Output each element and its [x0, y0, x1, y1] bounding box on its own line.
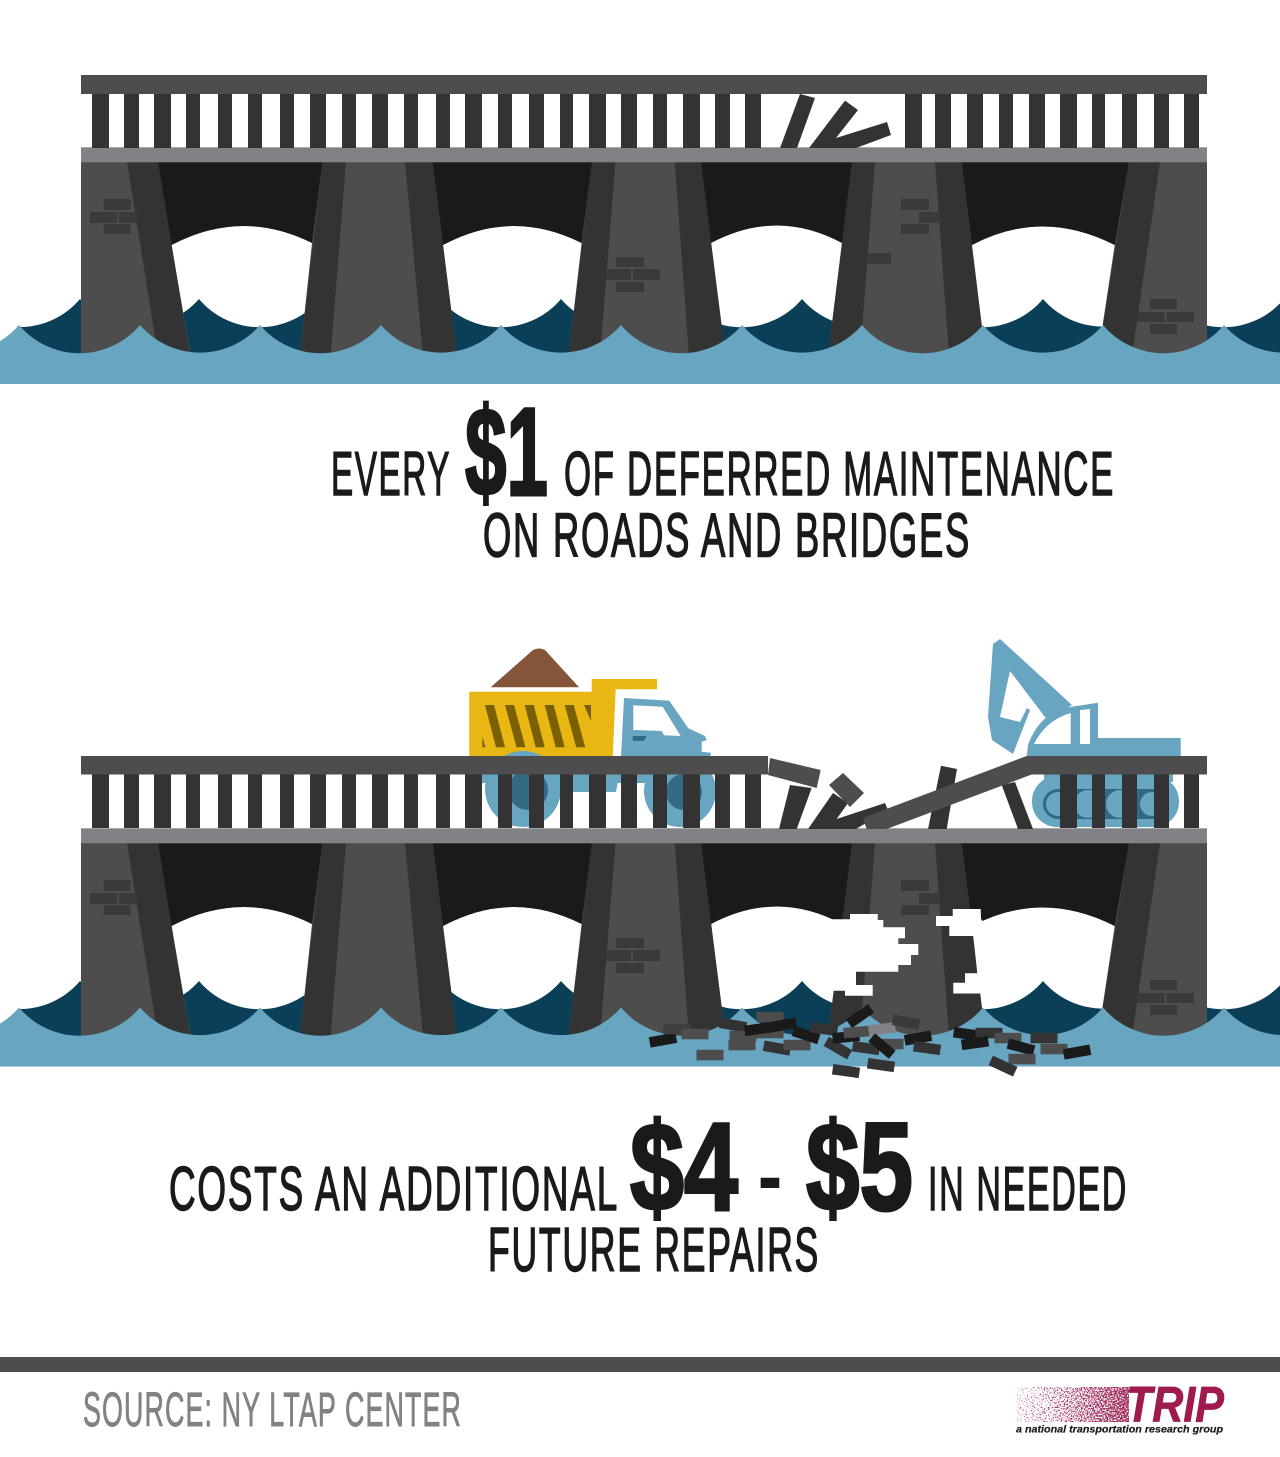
piers, arches and water	[0, 147, 1280, 384]
logo wordmark: TRIP	[1126, 1376, 1225, 1432]
headline: costs an additional $4 - $5: COSTS AN ADDITIONAL	[169, 1155, 619, 1224]
truck chassis and wheels	[481, 751, 716, 827]
headline: every $1 of deferred maintenance: EVERY	[331, 440, 451, 509]
headline: every $1 of deferred maintenance: $1	[465, 383, 548, 522]
broken balusters and rail pieces	[768, 758, 1033, 829]
yellow dump bed	[469, 679, 657, 757]
excavator arm	[988, 639, 1072, 754]
headline: costs an additional $4 - $5: FUTURE REPAIRS	[488, 1216, 820, 1285]
icon: dump truck	[469, 648, 716, 827]
top rail	[81, 75, 1207, 94]
source credit: SOURCE: NY LTAP CENTER	[83, 1384, 462, 1437]
crawler track	[1032, 770, 1179, 827]
truck cab	[621, 698, 711, 757]
speckled logo fade	[1017, 1387, 1129, 1422]
top bridge: intact structure with broken railing	[0, 75, 1280, 384]
excavator windows	[1034, 709, 1090, 744]
broken balusters	[780, 94, 891, 148]
railing balusters	[92, 774, 1199, 828]
headline: costs an additional $4 - $5: $4	[630, 1098, 738, 1237]
headline: every $1 of deferred maintenance	[331, 383, 1115, 570]
left rail section	[81, 756, 768, 774]
railing balusters	[92, 94, 1199, 148]
cab window	[633, 705, 681, 736]
collapsed rail ramp	[863, 756, 1207, 829]
door handle	[633, 736, 647, 741]
piers, arches and water	[0, 828, 1280, 1066]
footer divider bar	[0, 1357, 1280, 1372]
crumbled hole in the pier	[825, 914, 918, 996]
bottom bridge: crumbling structure with construction vehicles	[0, 639, 1280, 1078]
headline: costs an additional $4 - $5: -	[759, 1138, 781, 1216]
headline: costs an additional $4 - $5	[169, 1098, 1128, 1285]
logo tagline: a national transportation research group	[1016, 1424, 1224, 1436]
rubble pile	[649, 1004, 1091, 1078]
icon: excavator	[988, 639, 1181, 827]
sand load	[491, 648, 579, 687]
logo: TRIP	[1016, 1376, 1225, 1436]
bed stripes	[482, 705, 591, 747]
excavator cab	[1027, 703, 1181, 757]
headline: costs an additional $4 - $5: $5	[806, 1098, 913, 1237]
